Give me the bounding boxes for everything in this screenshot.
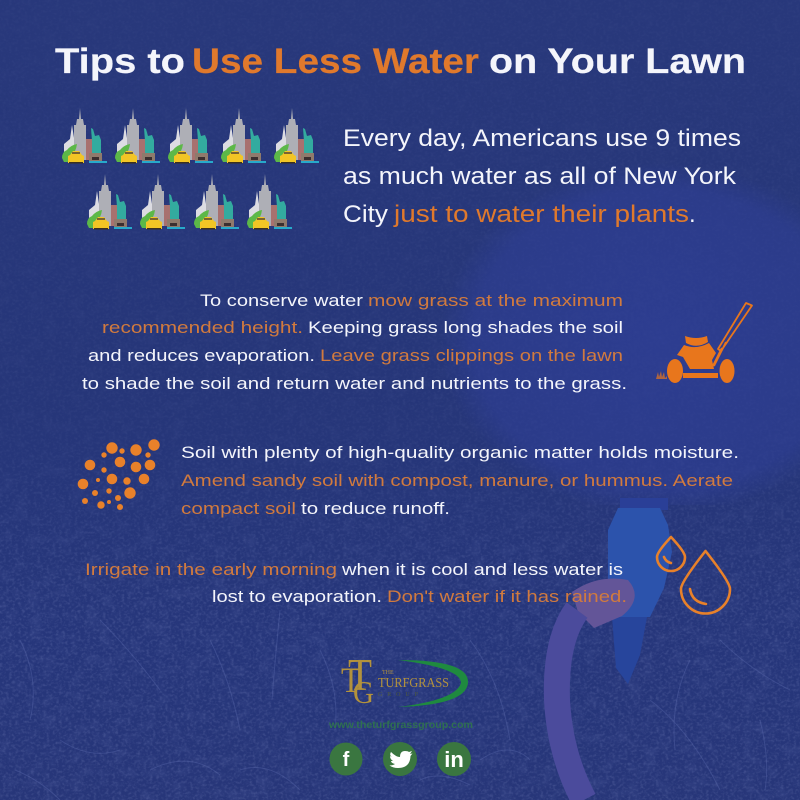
- tip: soil text: [181, 443, 739, 518]
- tip: mowing text: recommended height.: [102, 318, 303, 337]
- title: Tips to: [55, 42, 185, 81]
- intro statement: as much water as all of New York: [343, 163, 737, 190]
- logo: The Turfgrass Group: [341, 649, 468, 710]
- tip: soil text: Amend sandy soil with compost, manure, or hummus. Aerate: [181, 471, 733, 490]
- intro statement: City: [343, 201, 388, 228]
- social icon: facebook: [330, 742, 362, 776]
- logo: The Turfgrass Group: T: [341, 660, 361, 700]
- social icon: linkedin: [437, 742, 471, 776]
- title: on Your Lawn: [489, 42, 746, 81]
- social icon: facebook: f: [343, 749, 350, 771]
- tip: irrigation text: [85, 560, 627, 606]
- tip: soil text: Soil with plenty of high-quality organic matter holds moisture.: [181, 443, 739, 462]
- tip: soil text: to reduce runoff.: [301, 499, 450, 518]
- title: Use Less Water: [192, 42, 479, 81]
- icon: soil particles: [78, 439, 160, 510]
- tip: mowing text: and reduces evaporation.: [88, 346, 315, 365]
- tip: irrigation text: when it is cool and less water is: [341, 560, 623, 579]
- icon: water drops: [657, 537, 730, 614]
- sprinkler photo silhouette: [380, 120, 800, 800]
- social icon: twitter: [383, 742, 417, 776]
- social icon: linkedin: in: [444, 747, 464, 772]
- tip: soil text: compact soil: [181, 499, 296, 518]
- title: [55, 42, 746, 81]
- logo: The Turfgrass Group: T: [348, 649, 372, 700]
- tip: mowing text: To conserve water: [200, 291, 363, 310]
- logo: The Turfgrass Group: GROUP: [378, 692, 419, 698]
- intro statement: just to water their plants: [393, 201, 689, 228]
- tip: mowing text: Keeping grass long shades the soil: [308, 318, 623, 337]
- tip: mowing text: mow grass at the maximum: [368, 291, 623, 310]
- tip: mowing text: [82, 291, 627, 393]
- logo: The Turfgrass Group: THE: [382, 670, 394, 676]
- intro statement: .: [689, 201, 696, 228]
- tip: irrigation text: Don't water if it has rained.: [387, 587, 627, 606]
- icon: lawn mower: [656, 303, 752, 383]
- tip: irrigation text: Irrigate in the early morning: [85, 560, 337, 579]
- tip: mowing text: Leave grass clippings on the lawn: [320, 346, 623, 365]
- tip: mowing text: to shade the soil and return water and nutrients to the grass.: [82, 374, 627, 393]
- intro statement: Every day, Americans use 9 times: [343, 125, 741, 152]
- logo: The Turfgrass Group: G: [353, 674, 374, 710]
- intro statement: [343, 125, 741, 228]
- tip: irrigation text: lost to evaporation.: [212, 587, 382, 606]
- icon group: nine New York City pictograms: [62, 108, 319, 230]
- website url: www.theturfgrassgroup.com: [328, 720, 473, 731]
- logo: The Turfgrass Group: TURFGRASS: [378, 675, 449, 690]
